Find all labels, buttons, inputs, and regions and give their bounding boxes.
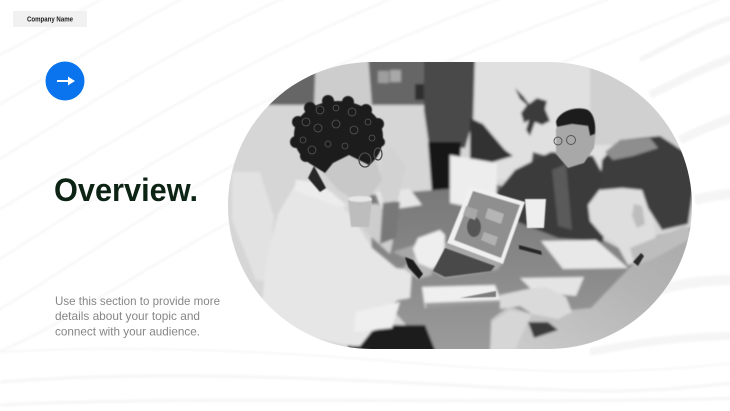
description text: connect with your audience.: [55, 324, 200, 338]
photo details: [308, 108, 644, 298]
photo: team meeting in pill frame: [220, 55, 705, 356]
icon: blue arrow button: [46, 62, 84, 100]
description text: details about your topic and: [55, 309, 200, 323]
description text: Use this section to provide more: [55, 294, 220, 308]
company name tag: [13, 11, 87, 27]
description text: [55, 294, 220, 338]
man's glasses: [554, 136, 576, 145]
title: Overview.: [54, 172, 198, 208]
company name tag: Company Name: [27, 16, 73, 24]
woman's glasses: [359, 148, 382, 167]
woman's curly hair: [290, 95, 385, 173]
